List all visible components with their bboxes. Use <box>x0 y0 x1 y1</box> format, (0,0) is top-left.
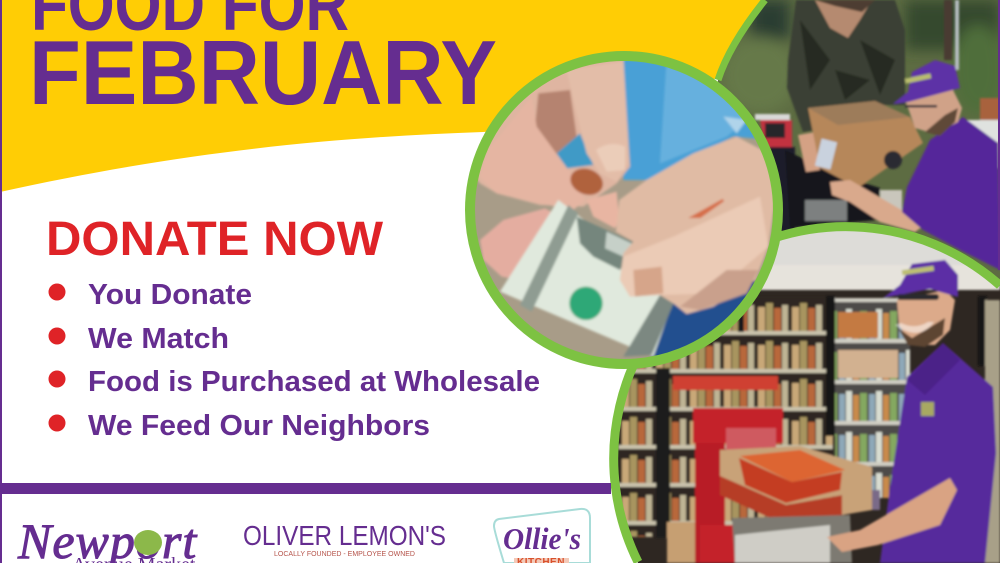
right page edge <box>998 0 1000 270</box>
list: donation steps <box>48 279 540 442</box>
store shelves <box>618 292 1000 563</box>
title: FEBRUARY <box>29 23 497 124</box>
left page edge <box>0 0 2 563</box>
cardboard box <box>808 101 923 188</box>
heading: donate now: DONATE NOW <box>46 213 384 266</box>
dollar bill <box>500 200 677 357</box>
red crates <box>693 408 783 563</box>
step 4: We Feed Our Neighbors <box>88 410 430 442</box>
store ceiling and soffit <box>760 231 1000 292</box>
worker with purple cap and shirt <box>830 180 923 232</box>
logo: Oliver Lemon's: LOCALLY FOUNDED - EMPLOYEE OWNED <box>274 549 416 558</box>
photo: grocery store worker with cart <box>610 225 1000 563</box>
left hand <box>470 53 630 207</box>
step 1: You Donate <box>88 279 252 311</box>
logo: Ollie's box: Ollie's <box>503 521 581 556</box>
store worker <box>827 260 996 563</box>
ring: store photo border <box>614 227 1000 562</box>
step 2: We Match <box>88 323 229 355</box>
penny <box>569 167 604 196</box>
man in camouflage jacket <box>787 0 905 132</box>
ring: hands photo border <box>470 56 778 364</box>
step 3: Food is Purchased at Wholesale <box>88 366 540 398</box>
cardboard carton on floor <box>667 522 701 563</box>
photo: volunteers loading a donation box <box>718 0 1000 286</box>
logo: Oliver Lemon's: OLIVER LEMON'S <box>243 520 446 551</box>
logo: Ollie's box <box>494 509 590 563</box>
panel: yellow header shape <box>0 0 764 192</box>
ring: top photo border <box>718 0 765 80</box>
right hand <box>616 137 775 314</box>
purple divider bar <box>0 483 611 494</box>
photo: hands holding a dollar bill and a coin <box>470 53 780 365</box>
cart with produce boxes <box>720 446 872 563</box>
